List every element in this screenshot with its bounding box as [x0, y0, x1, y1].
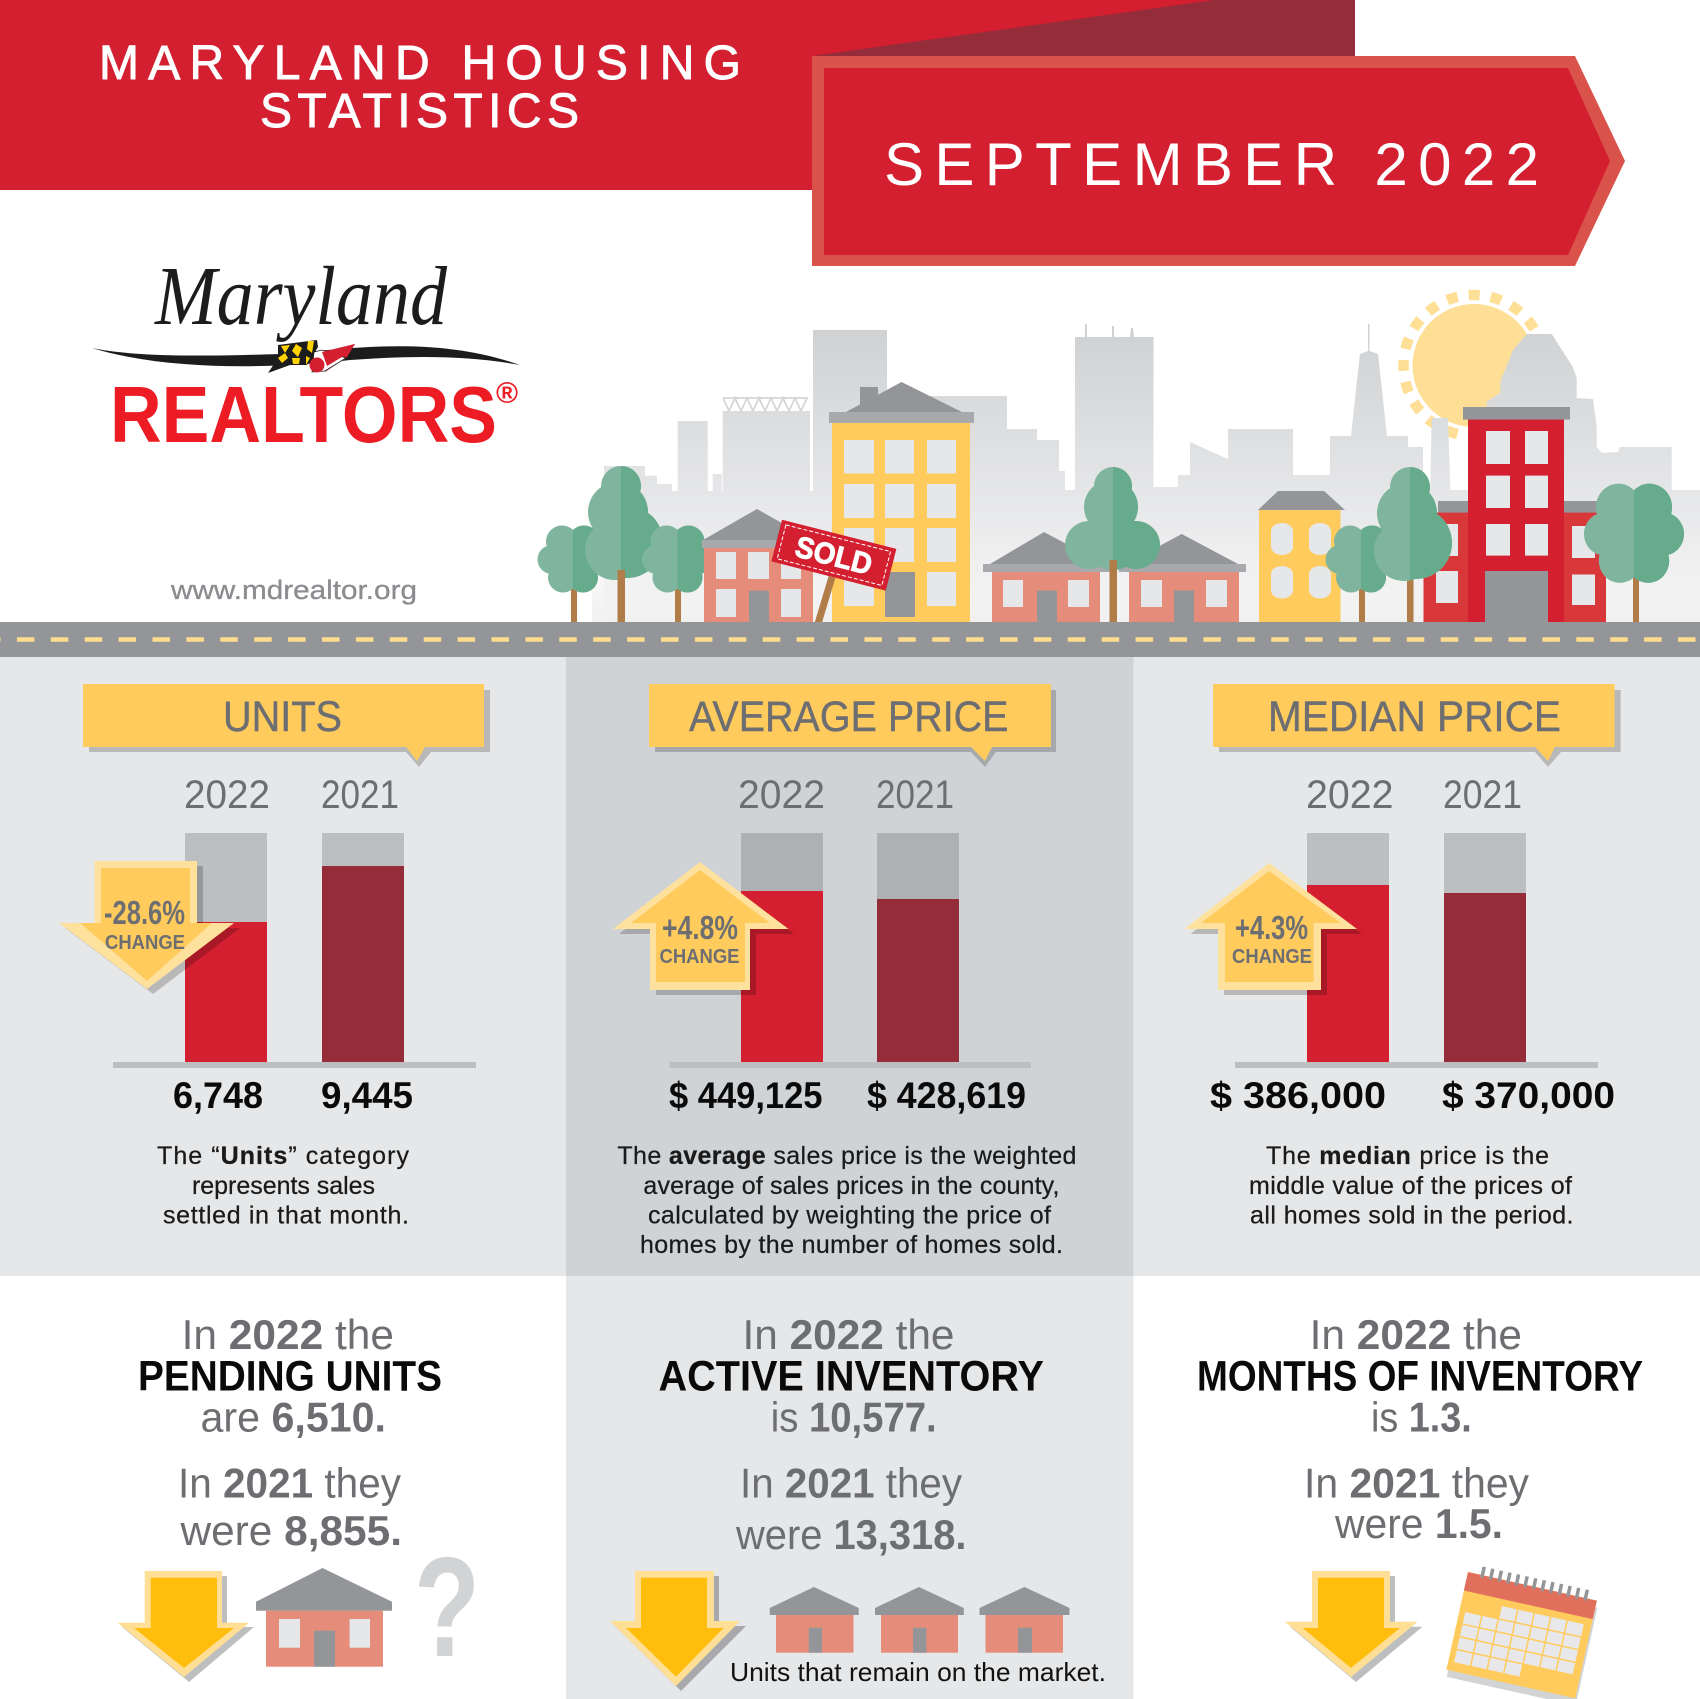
- months of inventory text: were 1.5.: [1334, 1500, 1503, 1547]
- median price year labels: 2022: [1306, 773, 1394, 817]
- panel: units: [0, 657, 566, 1276]
- pink house left: [702, 509, 814, 622]
- sun: [1404, 295, 1544, 436]
- pending units text: In 2021 they: [178, 1460, 401, 1507]
- panel: months of inventory: [1197, 1311, 1643, 1699]
- panel: median price: [1134, 657, 1700, 1276]
- tree: [585, 466, 663, 625]
- tree: [1326, 526, 1396, 623]
- logo script wordmark: Maryland: [154, 250, 448, 343]
- narrow yellow building: [1258, 491, 1345, 622]
- median price description: all homes sold in the period.: [1250, 1202, 1574, 1230]
- active inventory text: is 10,577.: [771, 1394, 937, 1441]
- months of inventory text: In 2022 the: [1310, 1311, 1522, 1358]
- median price banner: MEDIAN PRICE: [1268, 693, 1561, 741]
- units bar chart: [113, 833, 476, 1068]
- road: [0, 622, 1700, 657]
- median price year labels: 2021: [1443, 773, 1522, 817]
- red building: [1424, 407, 1606, 622]
- units year labels: 2022: [184, 773, 270, 817]
- icon: down arrow: [118, 1571, 254, 1682]
- units description: settled in that month.: [163, 1202, 409, 1230]
- logo flag motif: [268, 340, 355, 373]
- months of inventory text: MONTHS OF INVENTORY: [1197, 1353, 1643, 1401]
- units description: represents sales: [192, 1172, 375, 1200]
- average price description: calculated by weighting the price of: [648, 1202, 1051, 1230]
- trees right group: [1326, 467, 1684, 623]
- months of inventory text: In 2021 they: [1304, 1460, 1529, 1507]
- pending units text: [138, 1311, 442, 1554]
- active inventory text: ACTIVE INVENTORY: [658, 1353, 1044, 1401]
- skyline silhouette: [604, 324, 1700, 622]
- icon: down arrow: [1285, 1571, 1422, 1682]
- months of inventory text: [1197, 1311, 1643, 1547]
- average price values: [669, 1075, 1026, 1116]
- units change arrow: -28.6%: [104, 894, 185, 931]
- tree: [642, 526, 713, 623]
- pink house 2: [1119, 534, 1246, 622]
- skyline crown detail: [723, 398, 808, 411]
- average price change arrow: +4.8%: [662, 909, 738, 946]
- registered mark: ®: [496, 377, 518, 410]
- average price banner: [649, 684, 1056, 767]
- units description: [157, 1142, 410, 1230]
- tree: [1065, 467, 1160, 625]
- pink house 1: [983, 532, 1110, 622]
- yellow apartment building: [829, 382, 974, 622]
- units values: 6,748: [173, 1075, 263, 1116]
- pending units text: In 2022 the: [182, 1311, 394, 1358]
- average price description: homes by the number of homes sold.: [640, 1231, 1063, 1259]
- units change arrow: CHANGE: [105, 932, 185, 954]
- average price description: average of sales prices in the county,: [643, 1172, 1059, 1200]
- units values: 9,445: [321, 1075, 413, 1116]
- median price year labels: [1306, 773, 1522, 817]
- average price year labels: 2021: [876, 773, 954, 817]
- title: STATISTICS: [260, 85, 579, 138]
- icon: house: [256, 1568, 392, 1667]
- SOLD sign: SOLD: [792, 531, 876, 582]
- tree: [1584, 484, 1684, 623]
- date ribbon: [812, 56, 1625, 266]
- median price change arrow: +4.3%: [1235, 909, 1308, 946]
- trees left group: [538, 466, 713, 625]
- ground haze: [592, 530, 1700, 622]
- tree: [1374, 467, 1452, 623]
- average price description: [617, 1142, 1076, 1259]
- months of inventory text: is 1.3.: [1371, 1394, 1472, 1441]
- SOLD sign: [771, 520, 896, 628]
- caption: Units that remain on the market.: [730, 1657, 1106, 1687]
- average price description: The average sales price is the weighted: [617, 1142, 1076, 1170]
- average price change arrow: CHANGE: [660, 946, 740, 968]
- average price banner: AVERAGE PRICE: [689, 693, 1008, 741]
- panel: active inventory: [566, 1276, 1134, 1699]
- pending units text: are 6,510.: [200, 1394, 386, 1441]
- units year labels: [184, 773, 399, 817]
- title: [99, 37, 741, 138]
- panel: average price: [566, 657, 1134, 1276]
- average price values: $ 449,125: [669, 1075, 822, 1116]
- median price description: The median price is the: [1266, 1142, 1549, 1170]
- median price banner: [1213, 684, 1621, 767]
- panel: pending units: [118, 1311, 480, 1687]
- logo swoosh: [92, 346, 520, 366]
- units banner: [83, 684, 490, 767]
- units description: The “Units” category: [157, 1142, 410, 1170]
- header band: [0, 0, 1355, 190]
- units values: [173, 1075, 413, 1116]
- date text: SEPTEMBER 2022: [884, 131, 1539, 198]
- median price change arrow: CHANGE: [1232, 946, 1312, 968]
- average price values: $ 428,619: [867, 1075, 1026, 1116]
- units banner: UNITS: [223, 693, 342, 741]
- header dark fold: [812, 0, 1355, 56]
- median price values: $ 370,000: [1442, 1075, 1615, 1116]
- pending units text: PENDING UNITS: [138, 1353, 442, 1401]
- median price values: [1210, 1075, 1615, 1116]
- tree: [538, 526, 608, 623]
- pending units text: were 8,855.: [179, 1507, 402, 1554]
- icon: house: [980, 1587, 1070, 1653]
- icon: calendar: [1445, 1569, 1599, 1699]
- icon: down arrow: [610, 1571, 746, 1691]
- active inventory text: were 13,318.: [735, 1511, 966, 1558]
- logo wordmark REALTORS: REALTORS: [110, 370, 497, 459]
- average price change arrow: [613, 862, 794, 995]
- median price change arrow: [1184, 863, 1362, 995]
- logo: Maryland Realtors: [92, 250, 520, 459]
- icon: house: [770, 1587, 859, 1653]
- icon: house: [875, 1587, 964, 1653]
- average price bar chart: [670, 833, 1031, 1068]
- median price description: [1249, 1142, 1574, 1230]
- active inventory text: [658, 1311, 1044, 1558]
- active inventory text: In 2021 they: [740, 1460, 962, 1507]
- website url: www.mdrealtor.org: [170, 575, 417, 605]
- icon: question mark: ?: [414, 1528, 480, 1687]
- median price values: $ 386,000: [1210, 1075, 1386, 1116]
- median price description: middle value of the prices of: [1249, 1172, 1572, 1200]
- median price bar chart: [1235, 833, 1598, 1068]
- average price year labels: 2022: [738, 773, 825, 817]
- cityscape illustration: [538, 295, 1700, 628]
- title: MARYLAND HOUSING: [99, 37, 741, 90]
- active inventory text: In 2022 the: [742, 1311, 954, 1358]
- average price year labels: [738, 773, 954, 817]
- units year labels: 2021: [321, 773, 399, 817]
- units change arrow: [59, 861, 240, 994]
